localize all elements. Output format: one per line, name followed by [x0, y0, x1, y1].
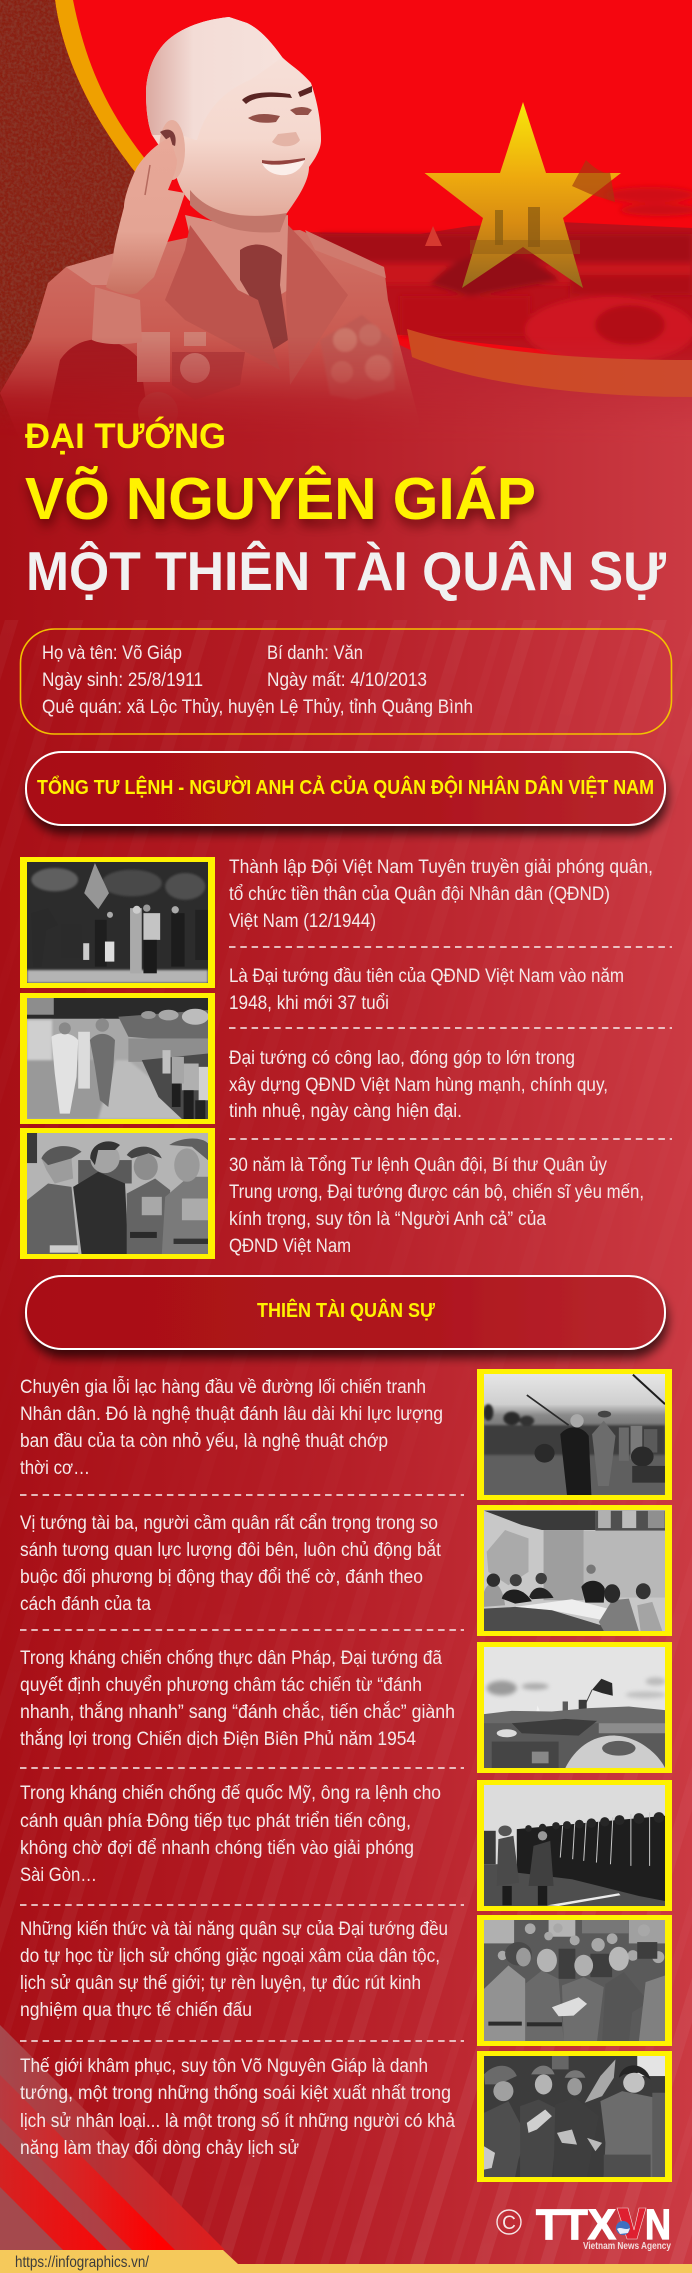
ear	[159, 120, 185, 180]
fact 1: tổ chức tiền thân của Quân đội Nhân dân (QĐND)	[229, 884, 610, 905]
area under ribbon	[400, 345, 692, 430]
fact 4: kính trọng, suy tôn là “Người Anh cả” của	[229, 1209, 546, 1230]
panel: biography info	[20, 629, 672, 734]
head	[146, 17, 321, 220]
photo: inspection walk	[20, 993, 215, 1124]
shoulder strap	[66, 253, 115, 285]
point 6: tướng, một trong những thống soái kiệt xuất nhất trong	[20, 2083, 451, 2104]
point 1	[20, 1376, 443, 1479]
point 4: Trong kháng chiến chống đế quốc Mỹ, ông ra lệnh cho	[20, 1783, 441, 1804]
orange ribbon	[407, 329, 692, 397]
fact 3: tinh nhuệ, ngày càng hiện đại.	[229, 1101, 462, 1122]
fact 3: xây dựng QĐND Việt Nam hùng mạnh, chính quy,	[229, 1075, 608, 1096]
orange arc	[55, 0, 150, 200]
point 3: Trong kháng chiến chống thực dân Pháp, Đại tướng đã	[20, 1648, 442, 1669]
heading pill: military genius: THIÊN TÀI QUÂN SỰ	[257, 1298, 435, 1322]
footer bar with URL	[0, 2250, 692, 2273]
logo: TTXVN	[536, 2201, 671, 2252]
fact 4	[229, 1155, 644, 1257]
textured dark panel	[0, 0, 170, 430]
medal cluster	[320, 315, 395, 400]
neck and shirt	[185, 215, 288, 320]
fact 2: Là Đại tướng đầu tiên của QĐND Việt Nam vào năm	[229, 966, 624, 987]
heading pill: commander	[26, 752, 665, 825]
point 4	[20, 1783, 441, 1886]
title line 2: VÕ NGUYÊN GIÁP	[25, 465, 536, 532]
point 3: nhanh, thắng nhanh” sang “đánh chắc, tiến chắc” giành	[20, 1701, 455, 1723]
panel: biography info: Họ và tên: Võ Giáp	[42, 643, 182, 664]
tie	[240, 245, 288, 350]
general portrait	[0, 17, 419, 440]
fact 2: 1948, khi mới 37 tuổi	[229, 993, 389, 1014]
title line 1: ĐẠI TƯỚNG	[25, 416, 226, 456]
medal ribbons	[137, 332, 245, 432]
nose and mouth	[262, 160, 305, 175]
yellow star	[424, 102, 621, 288]
point 1: thời cơ…	[20, 1458, 90, 1479]
footer bar with URL: https://infographics.vn/	[15, 2254, 149, 2271]
point 5: lịch sử quân sự thế giới; tự rèn luyện, tự đúc rút kinh	[20, 1973, 421, 1994]
hero sky	[0, 0, 692, 430]
photo: war room briefing	[477, 1505, 672, 1636]
point 2: buộc đối phương bị động thay đổi thế cờ, đánh theo	[20, 1567, 423, 1588]
photo: officers laughing	[477, 1915, 672, 2046]
title line 3: MỘT THIÊN TÀI QUÂN SỰ	[26, 540, 666, 602]
diagonal corner stripes	[0, 2025, 225, 2250]
point 1: Chuyên gia lỗi lạc hàng đầu về đường lối chiến tranh	[20, 1376, 426, 1398]
jacket	[0, 230, 419, 440]
list: commander facts	[229, 857, 672, 1257]
point 2	[20, 1513, 442, 1615]
hero fade	[0, 346, 692, 440]
photo: general with soldiers	[20, 1128, 215, 1259]
fact 1: Thành lập Đội Việt Nam Tuyên truyền giải phóng quân,	[229, 857, 653, 878]
battlefield landscape	[300, 187, 692, 365]
point 5	[20, 1919, 448, 2021]
point 6: lịch sử nhân loại... là một trong số ít những người có khả	[20, 2111, 455, 2132]
fact 3	[229, 1048, 608, 1122]
fact 1: Việt Nam (12/1944)	[229, 911, 376, 932]
photo: honor guard review	[477, 1780, 672, 1911]
point 1: Nhân dân. Đó là nghệ thuật đánh lâu dài khi lực lượng	[20, 1404, 443, 1425]
hair	[146, 17, 282, 140]
fact 2	[229, 966, 624, 1014]
fact 4: 30 năm là Tổng Tư lệnh Quân đội, Bí thư Quân ủy	[229, 1155, 607, 1176]
hero banner	[0, 0, 692, 445]
panel: biography info: Bí danh: Văn	[267, 643, 363, 664]
panel: biography info: Quê quán: xã Lộc Thủy, huyện Lệ Thủy, tỉnh Quảng Bình	[42, 697, 473, 718]
fact 3: Đại tướng có công lao, đóng góp to lớn trong	[229, 1048, 575, 1069]
eyes and brows	[242, 92, 292, 104]
panel: biography info: Ngày mất: 4/10/2013	[267, 670, 427, 691]
point 3: quyết định chuyển phương châm tác chiến từ “đánh	[20, 1675, 422, 1696]
photo: artillery inspection	[477, 1369, 672, 1500]
point 3: thắng lợi trong Chiến dịch Điện Biên Phủ năm 1954	[20, 1728, 416, 1750]
photo: Dien Bien Phu flag	[477, 1642, 672, 1773]
sleeve	[92, 287, 142, 344]
point 5: nghiệm qua thực tế chiến đấu	[20, 2000, 252, 2021]
point 4: Sài Gòn…	[20, 1865, 97, 1886]
saluting hand	[106, 137, 185, 294]
right lapel	[286, 225, 348, 385]
point 2: cách đánh của ta	[20, 1594, 151, 1615]
title	[25, 416, 666, 602]
point 6	[20, 2056, 455, 2159]
point 6: năng làm thay đổi dòng chảy lịch sử	[20, 2138, 299, 2159]
left lapel	[165, 225, 280, 370]
photo: general with women soldiers	[477, 2051, 672, 2182]
logo: TTXVN: N	[645, 2201, 671, 2249]
copyright mark	[497, 2210, 521, 2234]
logo: TTXVN: Vietnam News Agency	[583, 2241, 671, 2252]
point 5: Những kiến thức và tài năng quân sự của Đại tướng đều	[20, 1919, 448, 1940]
point 4: không chờ đợi để nhanh chóng tiến vào giải phóng	[20, 1838, 414, 1859]
point 6: Thế giới khâm phục, suy tôn Võ Nguyên Giáp là danh	[20, 2056, 428, 2077]
fact 4: Trung ương, Đại tướng được cán bộ, chiến sĩ yêu mến,	[229, 1182, 644, 1203]
copyright mark: C	[502, 2213, 516, 2234]
point 2: sánh tương quan lực lượng đôi bên, luôn chủ động bắt	[20, 1539, 442, 1561]
heading pill: military genius	[26, 1276, 665, 1349]
fact 1	[229, 857, 653, 932]
panel: biography info: Ngày sinh: 25/8/1911	[42, 670, 203, 691]
point 4: cánh quân phía Đông tiếp tục phát triển tiến công,	[20, 1811, 411, 1832]
point 2: Vị tướng tài ba, người cầm quân rất cẩn trọng trong so	[20, 1513, 438, 1534]
point 3	[20, 1648, 455, 1750]
photo: founding of the army	[20, 857, 215, 988]
point 5: do tự học từ lịch sử chống giặc ngoại xâm của dân tộc,	[20, 1946, 440, 1967]
logo: TTXVN: TTX	[536, 2201, 616, 2249]
fact 4: QĐND Việt Nam	[229, 1236, 351, 1257]
list: military genius points	[20, 1376, 464, 2159]
point 1: ban đầu của ta còn nhỏ yếu, là nghệ thuật chớp	[20, 1431, 388, 1452]
